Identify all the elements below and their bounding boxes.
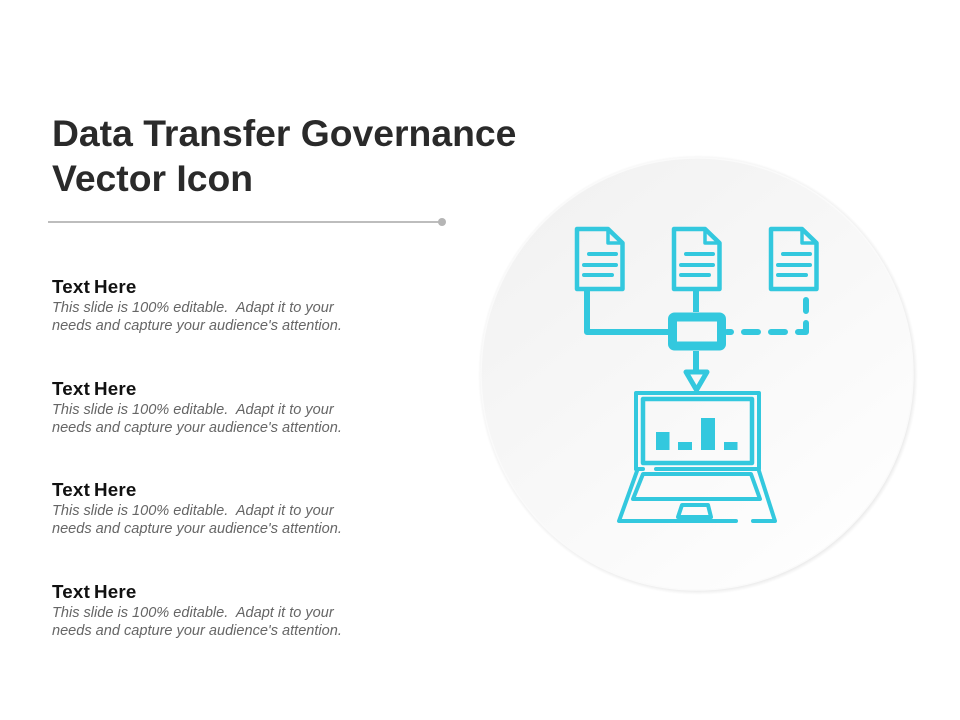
touchpad bbox=[678, 505, 711, 517]
bar chart on screen bbox=[656, 418, 738, 450]
text block 2: needs and capture your audience's attention. bbox=[52, 420, 342, 436]
text block 2: Text Here bbox=[52, 378, 137, 398]
circle background bbox=[478, 155, 918, 595]
central hub box bbox=[672, 317, 722, 346]
dashed connector from document 3 bbox=[727, 300, 806, 332]
icon: document 2 bbox=[674, 229, 720, 289]
title: Vector Icon bbox=[52, 157, 253, 199]
title: Data Transfer Governance bbox=[52, 112, 516, 154]
solid connector from document 2 bbox=[693, 291, 699, 312]
text block 4: needs and capture your audience's attention. bbox=[52, 623, 342, 639]
text block 1: This slide is 100% editable. Adapt it to your bbox=[52, 300, 334, 316]
text block 1 bbox=[52, 276, 342, 334]
solid connector from document 1 bbox=[587, 290, 668, 332]
text block 1: needs and capture your audience's attention. bbox=[52, 318, 342, 334]
icon: laptop bbox=[619, 393, 775, 521]
icon: data transfer bbox=[577, 229, 816, 521]
text block 2 bbox=[52, 378, 342, 436]
keyboard bbox=[633, 474, 760, 499]
text block 4: Text Here bbox=[52, 580, 137, 602]
laptop base bbox=[619, 471, 775, 521]
title bbox=[52, 112, 516, 199]
text block 1: Text Here bbox=[52, 276, 137, 296]
laptop lid bbox=[636, 393, 759, 469]
divider line with dot bbox=[48, 218, 446, 226]
down arrow bbox=[686, 351, 707, 390]
icon: document 3 bbox=[771, 229, 816, 289]
text block 2: This slide is 100% editable. Adapt it to your bbox=[52, 402, 334, 418]
laptop screen bbox=[643, 399, 752, 463]
text block 3 bbox=[52, 478, 342, 537]
text block 3: needs and capture your audience's attention. bbox=[52, 521, 342, 537]
text block 3: This slide is 100% editable. Adapt it to your bbox=[52, 503, 334, 519]
text block 3: Text Here bbox=[52, 478, 137, 500]
text block 4: This slide is 100% editable. Adapt it to your bbox=[52, 605, 334, 621]
icon: document 1 bbox=[577, 229, 622, 289]
text block 4 bbox=[52, 580, 342, 639]
